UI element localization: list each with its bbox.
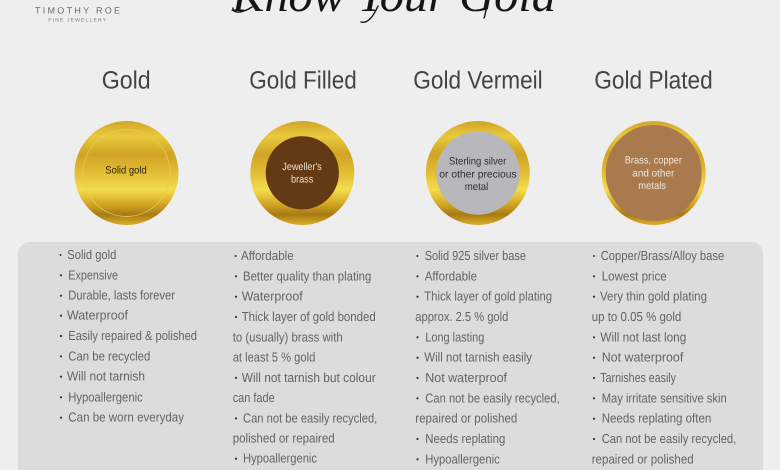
list: gold filled: Thick layer of gold bonded: [242, 309, 376, 324]
list: gold filled: [233, 248, 377, 466]
column headings: Gold: [102, 66, 151, 94]
list: gold filled: Better quality than plating: [243, 268, 371, 283]
coin: gold vermeil: or other precious: [439, 169, 517, 181]
list: gold: Waterproof: [67, 308, 128, 323]
list: gold filled: Affordable: [241, 248, 294, 263]
list: gold: Can be recycled: [68, 348, 150, 363]
list: gold vermeil: Solid 925 silver base: [425, 248, 526, 263]
list: gold filled: Can not be easily recycled,: [243, 410, 377, 425]
list: gold: Solid gold: [67, 247, 116, 262]
list: gold vermeil: Needs replating: [425, 431, 505, 446]
coin: gold plated: [602, 121, 706, 225]
list: gold plated: Can not be easily recycled,: [602, 431, 736, 446]
list: gold: Easily repaired & polished: [68, 328, 197, 343]
list: gold vermeil: [415, 248, 560, 466]
column headings: Gold Plated: [594, 66, 713, 94]
column headings: Gold Vermeil: [413, 66, 543, 94]
coin: gold filled: Jeweller's: [282, 161, 322, 173]
list: gold filled: polished or repaired: [233, 431, 335, 446]
list: gold vermeil: Thick layer of gold plating: [424, 289, 552, 304]
coin: gold vermeil: metal: [465, 181, 488, 193]
list: gold filled: at least 5 % gold: [233, 350, 315, 364]
list: gold filled: Hypoallergenic: [243, 451, 317, 466]
coin: gold plated: metals: [638, 180, 666, 192]
list: gold vermeil: Not waterproof: [425, 370, 507, 385]
coin: gold filled: [250, 121, 354, 225]
list: gold: Durable, lasts forever: [68, 288, 176, 303]
coin: gold plated: Brass, copper: [625, 155, 682, 167]
list: gold plated: up to 0.05 % gold: [592, 309, 681, 324]
list: gold: Can be worn everyday: [68, 410, 184, 425]
coin: gold vermeil: [426, 121, 530, 225]
list: gold plated: [592, 248, 736, 466]
list: gold filled: to (usually) brass with: [233, 329, 343, 344]
list: gold vermeil: approx. 2.5 % gold: [415, 309, 508, 324]
panel: properties: [18, 242, 763, 470]
coin: solid gold: [74, 121, 178, 225]
list: gold: Hypoallergenic: [68, 389, 143, 404]
logo: Timothy Roe Fine Jewellery: FINE JEWELLERY: [48, 18, 107, 24]
list: gold vermeil: Long lasting: [425, 329, 484, 344]
list: gold plated: Needs replating often: [602, 411, 711, 426]
list: gold filled: can fade: [233, 390, 275, 405]
list: gold: Expensive: [68, 267, 118, 282]
coin: solid gold: Solid gold: [105, 164, 147, 176]
list: gold plated: Not waterproof: [602, 350, 684, 365]
list: gold vermeil: Can not be easily recycled,: [425, 390, 560, 405]
list: gold plated: Tarnishes easily: [600, 370, 676, 385]
logo: Timothy Roe Fine Jewellery: [35, 6, 120, 24]
column headings: Gold Filled: [249, 66, 357, 94]
list: gold plated: Will not last long: [600, 329, 686, 344]
list: gold vermeil: repaired or polished: [415, 411, 517, 426]
list: gold plated: repaired or polished: [592, 451, 694, 466]
logo: Timothy Roe Fine Jewellery: TIMOTHY ROE: [35, 6, 120, 16]
list: gold plated: Lowest price: [602, 268, 667, 283]
list: gold filled: Waterproof: [242, 289, 303, 304]
list: gold vermeil: Affordable: [425, 268, 477, 283]
list: gold plated: Copper/Brass/Alloy base: [601, 248, 724, 263]
list: gold plated: Very thin gold plating: [600, 289, 707, 304]
coin: gold filled: brass: [291, 174, 313, 186]
list: gold vermeil: Hypoallergenic: [425, 451, 500, 466]
coin: gold plated: and other: [632, 167, 675, 179]
list: gold: Will not tarnish: [67, 369, 145, 384]
list: gold: [60, 247, 197, 425]
coin: gold vermeil: Sterling silver: [449, 156, 507, 168]
list: gold filled: Will not tarnish but colour: [242, 370, 376, 385]
list: gold plated: May irritate sensitive skin: [602, 390, 727, 405]
list: gold vermeil: Will not tarnish easily: [424, 350, 532, 365]
column headings: [102, 66, 713, 94]
